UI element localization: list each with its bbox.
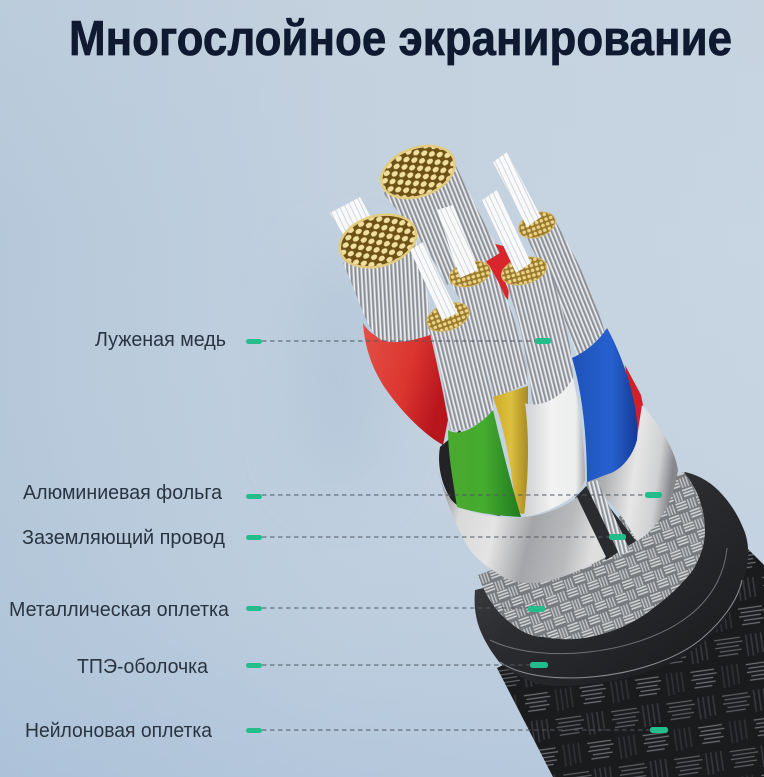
label: TPE sheath — [77, 656, 548, 678]
foil shield, left piece — [438, 470, 606, 583]
rear gold conductor — [374, 136, 462, 208]
foil interior — [439, 430, 500, 516]
label: metal braid — [9, 599, 545, 621]
nylon braided jacket — [497, 548, 764, 777]
left tip — [330, 197, 375, 240]
label: ground wire — [22, 527, 626, 549]
label: aluminium foil — [23, 482, 662, 504]
rear big strand — [383, 160, 500, 285]
label: tinned copper — [95, 329, 551, 351]
leader lines — [262, 341, 650, 730]
white core — [524, 378, 585, 516]
left gold conductor — [334, 206, 422, 276]
ground wire slot — [575, 482, 636, 560]
label: nylon braid: Нейлоновая оплетка — [25, 720, 213, 742]
red core, rear — [363, 323, 448, 445]
yellow core — [493, 386, 528, 514]
green-core strand — [428, 310, 493, 431]
foil shield, right piece — [586, 405, 678, 541]
blue-core strand — [522, 217, 605, 357]
yellow-core strand — [450, 267, 528, 398]
label: metal braid: Металлическая оплетка — [9, 599, 230, 621]
TPE collar — [475, 472, 748, 686]
green core — [448, 410, 521, 517]
label: aluminium foil: Алюминиевая фольга — [23, 482, 223, 504]
cable illustration — [330, 136, 764, 777]
label: nylon braid — [25, 720, 668, 742]
label: ground wire: Заземляющий провод — [22, 527, 225, 549]
label: tinned copper: Луженая медь — [95, 329, 226, 351]
left big strand — [343, 238, 430, 342]
white-core strand — [503, 263, 573, 408]
label: TPE sheath: ТПЭ-оболочка — [77, 656, 209, 678]
metal braid — [478, 472, 705, 639]
ground wire — [585, 480, 630, 556]
blue core — [572, 328, 637, 482]
